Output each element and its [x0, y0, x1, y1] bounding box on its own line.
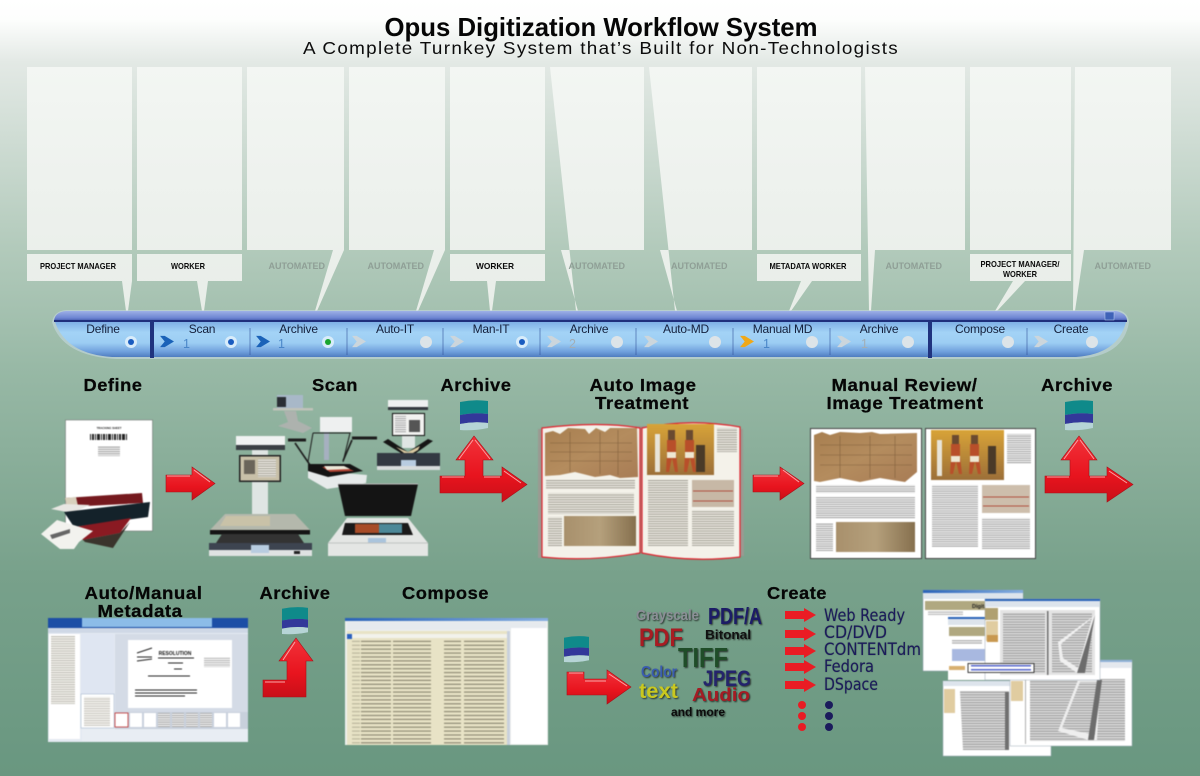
file formats word cloud: [636, 603, 762, 719]
link callout: [968, 664, 1034, 672]
arrow: scan to archive and auto image treatment: [440, 436, 527, 502]
window: collection home: Digital Book Collections: [972, 604, 1035, 610]
scanner: main overhead: [209, 436, 312, 556]
segment: compose: Compose: [955, 322, 1005, 336]
book stack: [65, 493, 143, 507]
screenshot: compose table window: [345, 618, 548, 745]
heading: compose: Compose: [402, 583, 489, 603]
continuation dots: [798, 701, 833, 731]
panel: compose role: [970, 67, 1071, 311]
panel: metadata role: [757, 67, 861, 311]
heading: auto/manual metadata: Metadata: [98, 601, 182, 621]
fresco: [647, 424, 714, 475]
panel: define role: PROJECT MANAGER: [40, 261, 116, 271]
file formats word cloud: PDF: [639, 624, 683, 652]
panel: scan role: WORKER: [171, 261, 205, 271]
segment: archive 2: [540, 322, 636, 357]
segment: archive 2: 2: [569, 337, 576, 351]
panel: create automated: [1073, 67, 1171, 311]
heading: archive 3: Archive: [260, 583, 330, 603]
panel: manual image treatment role: [450, 67, 545, 311]
file formats word cloud: JPEG: [703, 666, 751, 691]
page text: [717, 428, 737, 452]
heading: manual review: Manual Review/: [832, 375, 978, 395]
segment: archive 3: [830, 322, 928, 357]
screenshot: metadata window: [48, 618, 248, 742]
segment: archive 2: Archive: [570, 322, 609, 336]
heading: manual review: Image Treatment: [826, 393, 984, 413]
heading: auto/manual metadata: Auto/Manual: [84, 583, 202, 603]
segment: auto-it: Auto-IT: [376, 322, 415, 336]
heading: create: Create: [767, 583, 827, 603]
heading: auto image treatment: Treatment: [595, 393, 689, 413]
segment: manual md: [733, 322, 830, 357]
target: cd/dvd: CD/DVD: [824, 623, 887, 643]
panel: define role: [27, 67, 132, 311]
segment: create: Create: [1054, 322, 1089, 336]
segment: archive: 1: [278, 337, 285, 351]
target: dspace: DSpace: [824, 675, 878, 695]
segment: compose: [932, 322, 1027, 357]
segment: auto-md: Auto-MD: [663, 322, 710, 336]
panel: scan role: [137, 67, 242, 311]
icon: archive database 2: [1065, 400, 1093, 430]
file formats word cloud: and more: [671, 705, 725, 719]
file formats word cloud: TIFF: [678, 642, 728, 673]
title: Opus Digitization Workflow System: [384, 12, 818, 42]
window: collection list: [948, 617, 998, 680]
icon: archive database: [460, 400, 488, 430]
segment: archive: [250, 322, 347, 357]
arrow: metadata to archive: [263, 638, 313, 697]
manual review: right page: [926, 428, 1036, 558]
icon: archive database 3: [282, 607, 308, 634]
panel: create automated: AUTOMATED: [1094, 261, 1152, 271]
window: bottom left page view: [943, 681, 1051, 756]
heading: auto image treatment: [590, 375, 696, 413]
segment: auto-md: [636, 322, 733, 357]
heading: auto/manual metadata: [84, 583, 202, 621]
window: collection home: [923, 590, 1035, 671]
file formats word cloud: Color: [641, 664, 677, 681]
icon: archive database 4: [564, 636, 589, 662]
arrow: compose to create: [567, 670, 631, 704]
panel: archive 2 automated: AUTOMATED: [568, 261, 626, 271]
panel: auto image treatment automated: [349, 67, 445, 311]
segment: man-it: Man-IT: [473, 322, 510, 336]
file formats word cloud: PDF/A: [708, 603, 762, 629]
manual review: left page: [810, 428, 922, 558]
segment: archive 3: 1: [861, 337, 868, 351]
screenshot: metadata window: RESOLUTION: [159, 651, 192, 657]
segment: manual md: 1: [763, 337, 770, 351]
target: web ready: Web Ready: [824, 606, 905, 626]
file formats word cloud: Audio: [692, 685, 750, 705]
panel: archive 2 automated: [550, 67, 644, 311]
scanner: small top-left: [273, 395, 313, 433]
scanner: cradle: [288, 417, 377, 489]
define illustration: tracking sheet and books: [41, 420, 152, 549]
segment: create: [1027, 322, 1126, 357]
window: bottom right book view: [1010, 660, 1132, 746]
panel: archive 3 automated: [865, 67, 965, 311]
panel: archive automated: [247, 67, 344, 311]
panel: archive automated: AUTOMATED: [268, 261, 326, 271]
target: contentdm: CONTENTdm: [824, 640, 921, 660]
output targets list: [785, 606, 921, 695]
panel: auto image treatment automated: AUTOMATED: [368, 261, 424, 271]
heading: define: Define: [84, 375, 142, 395]
subtitle: A Complete Turnkey System that’s Built for Non-Technologists: [303, 38, 899, 58]
file formats word cloud: text: [639, 680, 678, 703]
heading: auto image treatment: Auto Image: [590, 375, 696, 395]
target: fedora: Fedora: [824, 657, 874, 677]
segment: archive 3: Archive: [860, 322, 899, 336]
panel: archive 3 automated: AUTOMATED: [886, 261, 942, 271]
workflow toolbar: [52, 310, 1129, 359]
heading: manual review: [826, 375, 984, 413]
segment: scan: Scan: [189, 322, 215, 336]
screenshots: digital book collections web pages: [923, 590, 1132, 756]
panel: compose role: WORKER: [1003, 269, 1037, 279]
arrow: define to scan: [166, 467, 215, 500]
panel: compose role: PROJECT MANAGER/: [980, 259, 1060, 269]
window: top right book view: [985, 599, 1100, 680]
segment: scan: [154, 322, 250, 357]
scan illustration: scanners: [209, 395, 440, 556]
panel: manual image treatment role: WORKER: [476, 261, 514, 271]
segment: auto-it: [347, 322, 443, 357]
segment: archive: Archive: [279, 322, 318, 336]
segment: man-it: [443, 322, 540, 357]
heading: archive 2: Archive: [1041, 375, 1113, 395]
panel: auto metadata automated: [649, 67, 752, 311]
auto image treatment: open book scan: [538, 423, 744, 559]
scanner: flatbed: [328, 484, 428, 556]
segment: scan: 1: [183, 337, 190, 351]
panel: auto metadata automated: AUTOMATED: [671, 261, 728, 271]
callout panels row: [27, 67, 1171, 311]
heading: scan: Scan: [312, 375, 358, 395]
papyrus: [545, 428, 638, 478]
scanner: book cradle: [377, 400, 440, 470]
heading: archive: Archive: [440, 375, 512, 395]
file formats word cloud: Bitonal: [705, 627, 751, 642]
arrow: manual review to archive and auto metadata: [1045, 436, 1133, 502]
segment: define: Define: [86, 322, 120, 336]
file formats word cloud: Grayscale: [636, 607, 699, 624]
segment: manual md: Manual MD: [753, 322, 813, 336]
segment: define: [55, 322, 150, 357]
panel: metadata role: METADATA WORKER: [770, 261, 846, 271]
tracking sheet: TRACKING SHEET: [97, 426, 122, 430]
arrow: auto to manual: [753, 467, 804, 500]
